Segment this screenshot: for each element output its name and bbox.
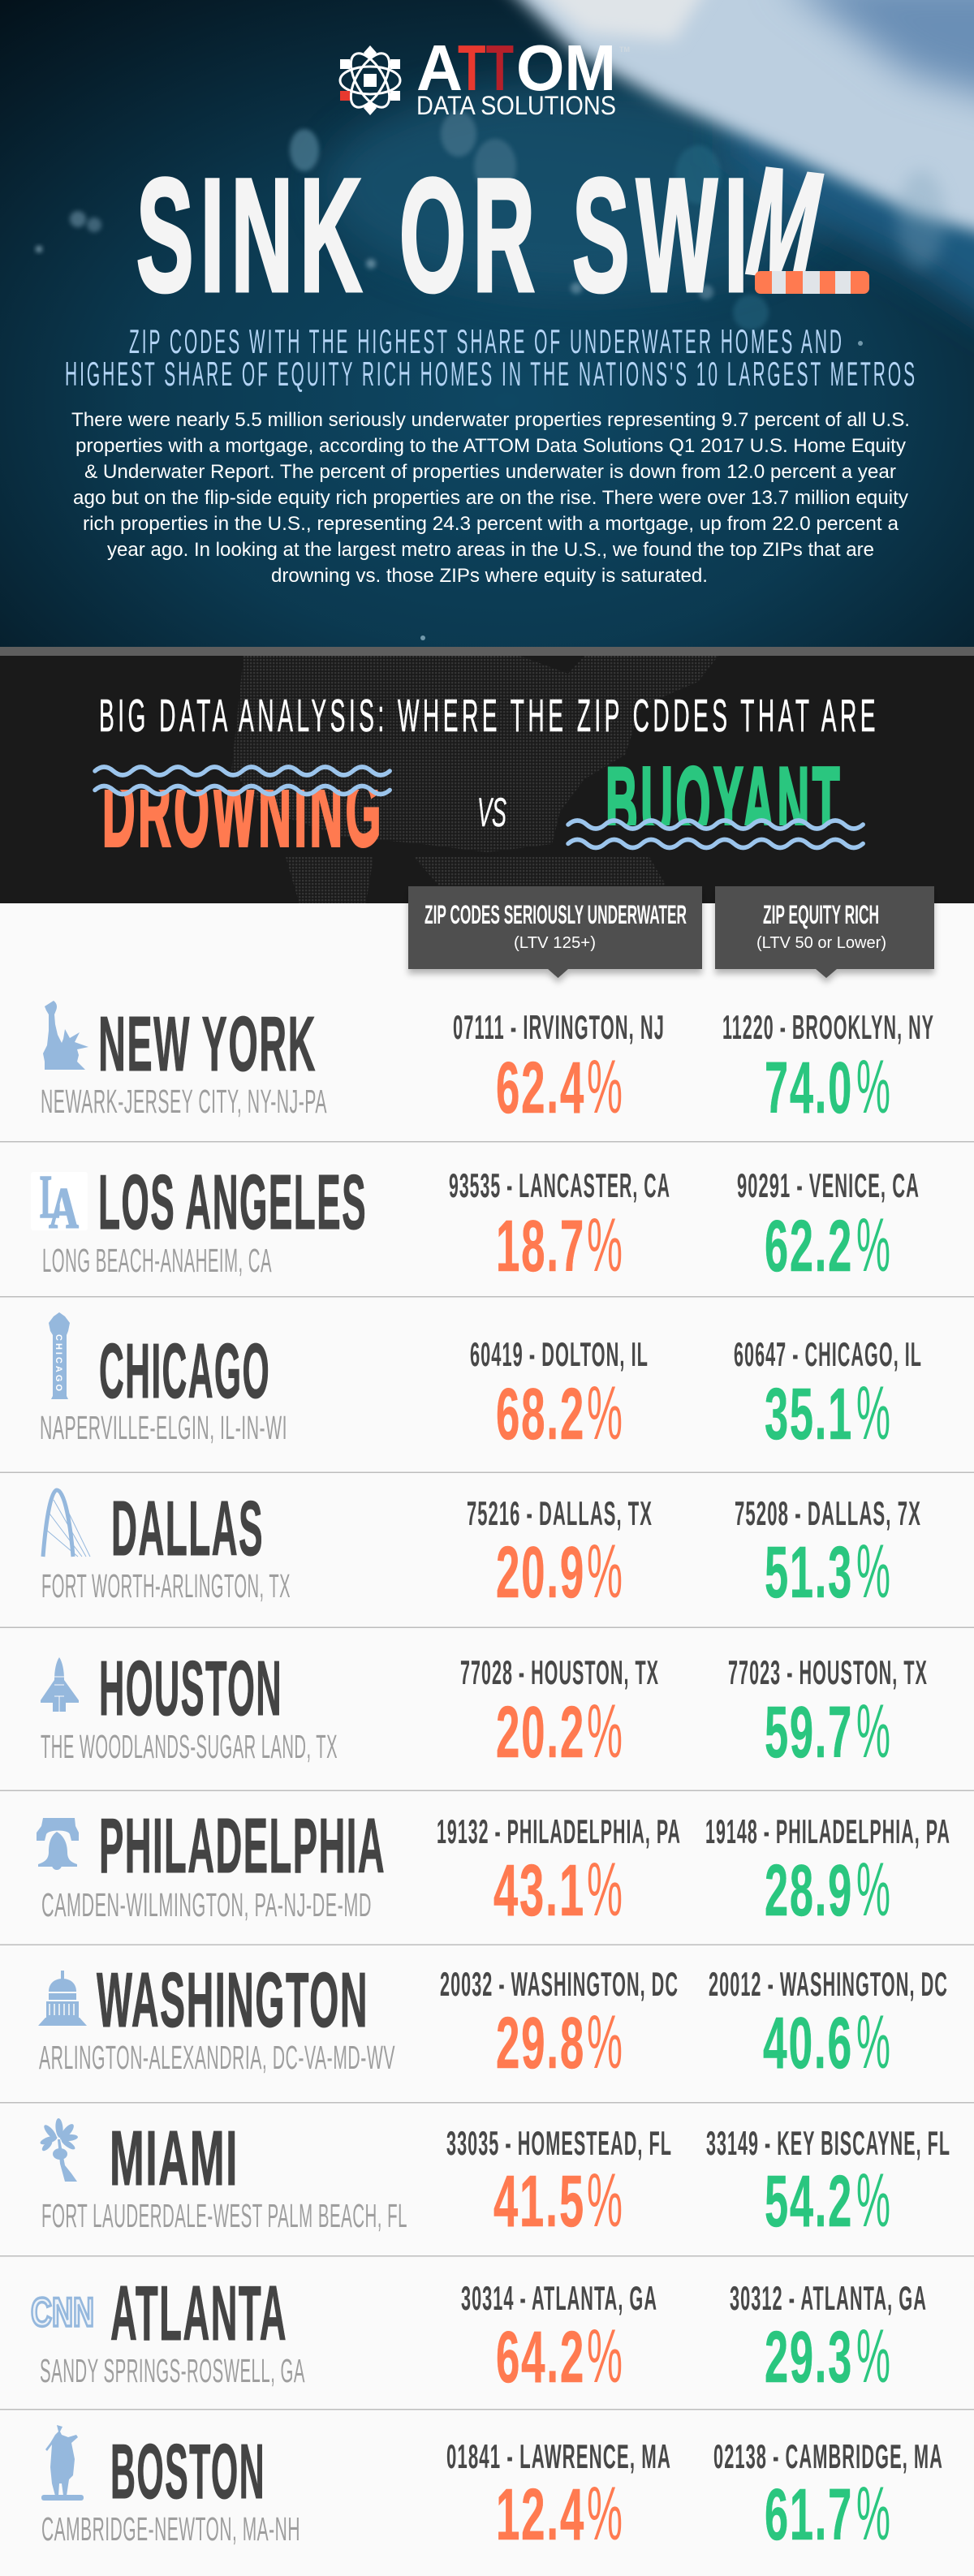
row: Chicago: 68.2 (496, 1374, 585, 1455)
row: Houston: 77028 - HOUSTON, TX (460, 1653, 659, 1691)
row: Houston: 59.7 (765, 1692, 853, 1773)
row: Houston: THE WOODLANDS-SUGAR LAND, TX (41, 1728, 338, 1765)
row: Chicago: % (856, 1370, 890, 1455)
row: Washington: 20032 - WASHINGTON, DC (440, 1965, 679, 2003)
row: Dallas: DALLAS (111, 1485, 264, 1572)
wordmark: DATA SOLUTIONS (416, 91, 616, 120)
row: Chicago (40, 1312, 922, 1455)
row: Houston: 20.2 (496, 1692, 585, 1773)
icon: palm trees (39, 2118, 78, 2182)
row: Miami: 41.5 (493, 2161, 585, 2242)
row: Boston: 61.7 (765, 2475, 853, 2556)
row: Dallas: FORT WORTH-ARLINGTON, TX (41, 1567, 291, 1605)
icon: ATTOM emblem (340, 45, 400, 115)
row: Chicago: CHICAGO (99, 1328, 270, 1415)
panel: big data analysis banner (0, 656, 974, 907)
drowning (93, 765, 392, 848)
row: Boston: 12.4 (496, 2475, 585, 2556)
icon: Chicago theatre sign (49, 1312, 70, 1399)
row: Atlanta (31, 2270, 927, 2398)
row: Atlanta: SANDY SPRINGS-ROSWELL, GA (40, 2352, 305, 2389)
intro paragraph: properties with a mortgage, according to the ATTOM Data Solutions Q1 2017 U.S. Home Equity (75, 435, 906, 457)
row: Houston (41, 1645, 928, 1773)
row: Dallas: 51.3 (765, 1532, 853, 1613)
row: Los Angeles: LONG BEACH-ANAHEIM, CA (42, 1242, 272, 1279)
row: New York: 62.4 (496, 1048, 585, 1129)
intro paragraph: rich properties in the U.S., representing 24.3 percent with a mortgage, up from 22.0 percent a (83, 513, 899, 535)
row: Boston (41, 2425, 943, 2556)
row: Chicago: NAPERVILLE-ELGIN, IL-IN-WI (40, 1409, 287, 1446)
row: Dallas: % (587, 1528, 623, 1613)
row: Los Angeles: 62.2 (765, 1206, 853, 1287)
row: New York: NEWARK-JERSEY CITY, NY-NJ-PA (41, 1083, 327, 1120)
icon: Statue of Liberty (43, 1001, 88, 1070)
row: Atlanta: 29.3 (765, 2317, 853, 2398)
row: Washington: % (856, 1999, 890, 2084)
intro paragraph: & Underwater Report. The percent of properties underwater is down from 12.0 percent a year (84, 461, 896, 483)
row: Atlanta: % (856, 2313, 890, 2398)
row: Philadelphia: 19132 - PHILADELPHIA, PA (437, 1812, 681, 1850)
row: Atlanta: 30314 - ATLANTA, GA (461, 2279, 657, 2317)
row: Chicago: 60419 - DOLTON, IL (470, 1335, 649, 1373)
icon: US Capitol (38, 1971, 87, 2026)
row: Philadelphia (37, 1803, 950, 1932)
row: Miami: 54.2 (765, 2161, 853, 2242)
row: Chicago: % (587, 1370, 623, 1455)
row: Miami: 33035 - HOMESTEAD, FL (446, 2124, 672, 2162)
column header: seriously underwater: (LTV 125+) (514, 934, 596, 952)
row: Boston: BOSTON (110, 2428, 265, 2515)
row: Washington: 40.6 (763, 2003, 853, 2084)
row: Philadelphia: CAMDEN-WILMINGTON, PA-NJ-DE-MD (41, 1886, 372, 1923)
column header: seriously underwater: ZIP CODES SERIOUSLY UNDERWATER (425, 900, 687, 929)
icon: equestrian statue (41, 2425, 84, 2501)
icon: Liberty Bell (37, 1818, 79, 1870)
row: Miami: MIAMI (110, 2115, 239, 2202)
wordmark: A (416, 32, 463, 104)
icon: LA logo: A (49, 1176, 79, 1241)
row: Los Angeles (31, 1159, 920, 1287)
subtitle (65, 322, 917, 393)
row: Washington: % (587, 1999, 623, 2084)
row: Dallas: 20.9 (496, 1532, 585, 1613)
vs: VS (477, 790, 506, 835)
icon: Chicago theatre sign: CHICAGO (54, 1334, 63, 1391)
row: Dallas: % (856, 1528, 890, 1613)
title: Sink or Swim: M (735, 136, 835, 313)
column header: equity rich: (LTV 50 or Lower) (756, 934, 886, 952)
intro paragraph: year ago. In looking at the largest metro areas in the U.S., we found the top ZIPs that are (107, 539, 874, 561)
intro paragraph (71, 409, 910, 587)
row: Los Angeles: LOS ANGELES (98, 1159, 367, 1246)
column header: equity rich (715, 886, 934, 978)
row: Atlanta: ATLANTA (110, 2270, 287, 2357)
row: New York: % (587, 1044, 623, 1129)
hero water photo background (0, 0, 974, 647)
row: New York: % (856, 1044, 890, 1129)
row: Los Angeles: 18.7 (496, 1206, 585, 1287)
row: Los Angeles: % (587, 1202, 623, 1287)
row: Philadelphia: PHILADELPHIA (99, 1803, 386, 1889)
intro paragraph: ago but on the flip-side equity rich properties are on the rise. There were over 13.7 million equity (73, 487, 908, 509)
row: Boston: CAMBRIDGE-NEWTON, MA-NH (41, 2510, 300, 2548)
row: Houston: HOUSTON (99, 1645, 282, 1732)
row: New York: NEW YORK (98, 1001, 317, 1088)
row: New York: 07111 - IRVINGTON, NJ (453, 1008, 665, 1046)
row: Dallas (41, 1485, 921, 1613)
logo: ATTOM Data Solutions (340, 32, 630, 120)
wordmark (416, 32, 630, 120)
row: Miami: % (587, 2157, 623, 2242)
panel: hero (0, 0, 974, 647)
intro paragraph: There were nearly 5.5 million seriously underwater properties representing 9.7 percent of all U.S. (71, 409, 910, 431)
wordmark: TM (619, 45, 630, 54)
row: Philadelphia: % (587, 1846, 623, 1932)
row: Washington: 29.8 (496, 2003, 585, 2084)
dotted world map (231, 656, 718, 907)
row: Dallas: 75216 - DALLAS, TX (467, 1494, 653, 1532)
column header: seriously underwater (408, 886, 702, 978)
row: Chicago: 35.1 (765, 1374, 853, 1455)
wordmark: OM (516, 32, 616, 104)
row: Boston: % (856, 2470, 890, 2556)
row: New York: 74.0 (765, 1048, 853, 1129)
row: Miami (39, 2115, 950, 2242)
wordmark: TT (458, 32, 514, 104)
row: Washington (38, 1957, 948, 2084)
row: Atlanta: % (587, 2313, 623, 2398)
row: Los Angeles: 93535 - LANCASTER, CA (449, 1166, 670, 1204)
row: Boston: 01841 - LAWRENCE, MA (446, 2437, 671, 2475)
row: Atlanta: 64.2 (496, 2317, 585, 2398)
row: Houston: % (856, 1688, 890, 1773)
row: Philadelphia: 43.1 (493, 1850, 585, 1932)
buoyant (566, 765, 865, 851)
row: Miami: % (856, 2157, 890, 2242)
row: Houston: % (587, 1688, 623, 1773)
icon: CNN logo: CNN (31, 2290, 94, 2335)
row: Washington: ARLINGTON-ALEXANDRIA, DC-VA-MD-WV (39, 2039, 395, 2076)
row: Boston: % (587, 2470, 623, 2556)
icon: space shuttle (41, 1657, 79, 1712)
divider bar (0, 647, 974, 656)
icon: life ring bar (755, 271, 869, 294)
row: Miami: FORT LAUDERDALE-WEST PALM BEACH, FL (41, 2197, 407, 2234)
intro paragraph: drowning vs. those ZIPs where equity is saturated. (271, 565, 708, 587)
panel: big data analysis banner: DROWNING (102, 756, 384, 868)
icon: Dallas bridge (43, 1490, 90, 1557)
icon: LA logo (31, 1163, 88, 1241)
row: Philadelphia: % (856, 1846, 890, 1932)
row: New York (41, 1001, 934, 1129)
row: Los Angeles: % (856, 1202, 890, 1287)
row: Philadelphia: 28.9 (765, 1850, 853, 1932)
row: Washington: WASHINGTON (97, 1957, 368, 2044)
column header: equity rich: ZIP EQUITY RICH (763, 900, 879, 929)
icon: LA logo: L (40, 1163, 61, 1231)
